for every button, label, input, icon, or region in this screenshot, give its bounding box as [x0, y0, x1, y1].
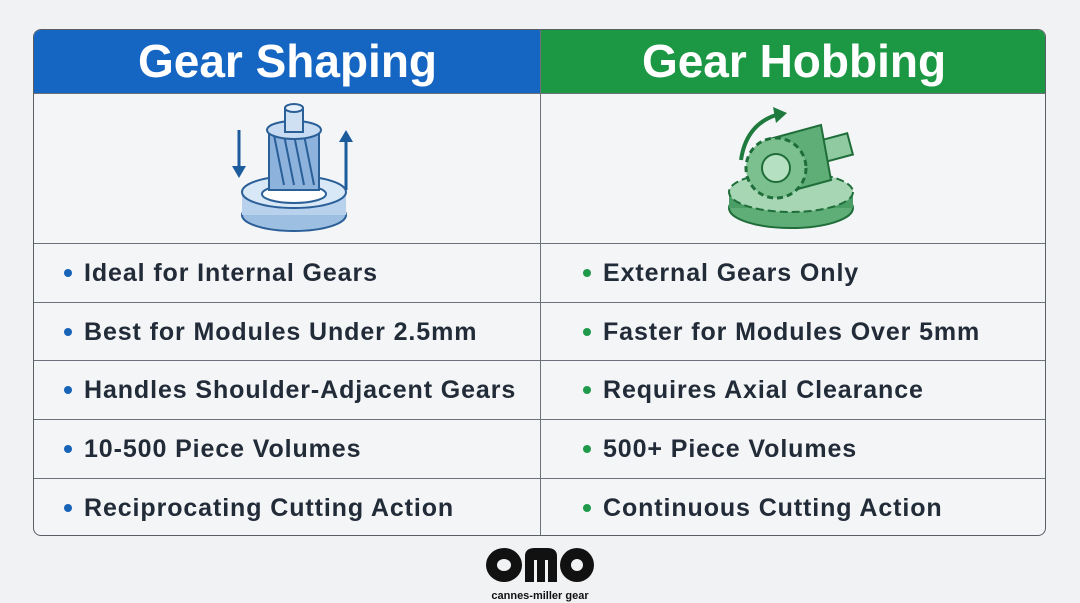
comparison table: Faster for Modules Over 5mm — [603, 318, 980, 346]
comparison table: Reciprocating Cutting Action — [84, 494, 454, 522]
comparison table: Best for Modules Under 2.5mm — [84, 318, 477, 346]
icon: gear hobbing — [728, 107, 854, 229]
comparison table: Handles Shoulder-Adjacent Gears — [84, 376, 516, 404]
logo: cannes-miller gear — [491, 590, 589, 602]
heading: Gear Shaping: Gear Shaping — [138, 35, 437, 87]
left rows: Ideal for Internal Gears — [84, 259, 378, 287]
comparison table: Continuous Cutting Action — [603, 494, 943, 522]
heading: Gear Hobbing: Gear Hobbing — [642, 35, 946, 87]
heading: Gear Hobbing — [541, 30, 1047, 93]
comparison table: Requires Axial Clearance — [603, 376, 924, 404]
comparison table: 500+ Piece Volumes — [603, 435, 857, 463]
comparison table — [33, 29, 1046, 536]
comparison table: 10-500 Piece Volumes — [84, 435, 361, 463]
logo — [486, 548, 594, 602]
icon: gear shaping — [232, 103, 353, 232]
right rows: External Gears Only — [603, 259, 859, 287]
heading: Gear Shaping — [34, 30, 541, 93]
